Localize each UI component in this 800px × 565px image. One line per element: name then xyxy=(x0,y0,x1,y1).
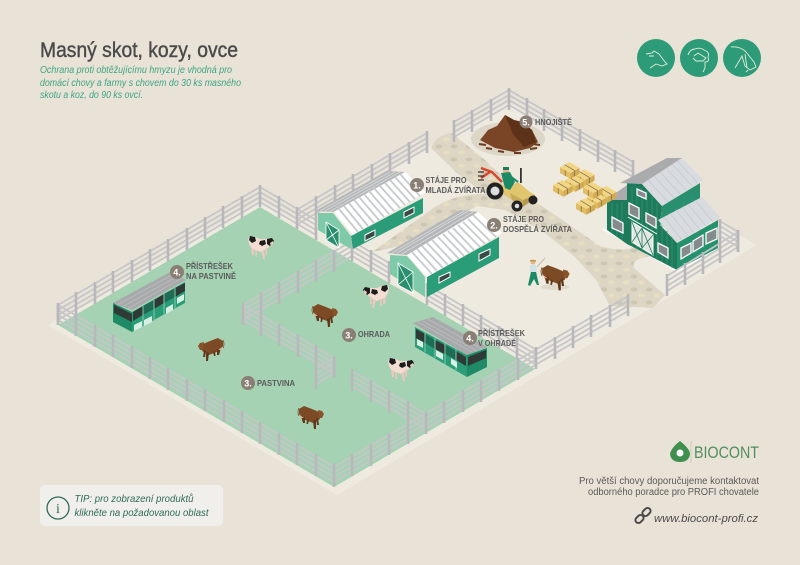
tip box: i xyxy=(56,502,60,517)
label 2: stables for adult animals: DOSPĚLÁ ZVÍŘATA xyxy=(503,223,572,234)
back fences xyxy=(58,88,738,364)
Biocont logo xyxy=(670,441,759,463)
Biocont logo: BIOCONT xyxy=(694,443,759,462)
website link text: www.biocont-profi.cz xyxy=(654,513,759,525)
holstein cow top xyxy=(248,236,274,259)
label 3: paddock: OHRADA xyxy=(358,329,390,339)
label 2: stables for adult animals: STÁJE PRO xyxy=(503,214,544,224)
label 2: stables for adult animals: 2. xyxy=(490,220,498,230)
farm ground platform xyxy=(48,103,757,495)
icon: sheep xyxy=(680,39,718,77)
tip box: klikněte na požadovanou oblast xyxy=(74,507,209,519)
label 1: stables for young animals: STÁJE PRO xyxy=(426,175,467,185)
tractor with driver xyxy=(478,167,538,212)
label 4: paddock shelter xyxy=(463,327,526,348)
label 3: pasture: PASTVINA xyxy=(257,378,295,388)
label 5: manure heap xyxy=(520,116,572,128)
advisor recommendation text: odborného poradce pro PROFI chovatele xyxy=(588,487,759,498)
brown cow in the paddock xyxy=(312,304,338,327)
label 5: manure heap: HNOJIŠTĚ xyxy=(535,116,572,127)
holstein cow by paddock shelter xyxy=(388,358,414,381)
subtitle: skotu a koz, do 90 ks ovcí. xyxy=(40,90,143,101)
farmer with cow xyxy=(528,258,570,290)
label 1: stables for young animals xyxy=(410,175,486,195)
advisor recommendation text: Pro větší chovy doporučujeme kontaktovat xyxy=(579,476,759,487)
right fence by barn xyxy=(667,230,738,296)
label 4: pasture shelter xyxy=(170,260,236,281)
label 1: stables for young animals: MLADÁ ZVÍŘATA xyxy=(426,184,486,195)
tip box: TIP: pro zobrazení produktů xyxy=(74,493,194,505)
label 4: paddock shelter: 4. xyxy=(466,334,474,344)
pasture and paddock green area xyxy=(58,207,535,487)
tip box xyxy=(40,485,223,526)
label 5: manure heap: 5. xyxy=(522,118,530,128)
shelter in the paddock xyxy=(413,317,487,377)
barn 2: stable for adult animals xyxy=(387,210,502,297)
subtitle: Ochrana proti obtěžujícímu hmyzu je vhodná pro xyxy=(40,65,232,76)
label 4: paddock shelter: PŘÍSTŘEŠEK xyxy=(478,327,526,338)
shelter on the pasture xyxy=(113,272,186,332)
cobblestone path xyxy=(372,133,665,308)
brown cow on the pasture left xyxy=(198,338,224,361)
label 4: pasture shelter: PŘÍSTŘEŠEK xyxy=(186,260,234,271)
large main barn xyxy=(603,158,720,272)
icon: link xyxy=(634,507,652,524)
front fences xyxy=(58,294,628,487)
label 3: paddock xyxy=(342,328,390,342)
title: Masný skot, kozy, ovce xyxy=(40,39,238,62)
label 3: pasture: 3. xyxy=(244,378,252,388)
label 1: stables for young animals: 1. xyxy=(413,180,421,190)
barn 1: stable for young animals xyxy=(315,171,426,249)
hay bales xyxy=(553,162,616,215)
subtitle xyxy=(40,65,241,101)
icon: cattle xyxy=(637,39,675,77)
label 3: paddock: 3. xyxy=(345,330,353,340)
icon: goat xyxy=(723,39,761,77)
holstein cow by barn 2 xyxy=(363,285,389,308)
label 4: pasture shelter: 4. xyxy=(173,268,181,278)
label 2: stables for adult animals xyxy=(487,214,572,234)
advisor recommendation text xyxy=(579,476,759,498)
label 4: pasture shelter: NA PASTVINĚ xyxy=(186,270,236,281)
brown cow on the pasture bottom xyxy=(298,406,324,429)
label 3: pasture xyxy=(241,376,295,390)
subtitle: domácí chovy a farmy s chovem do 30 ks masného xyxy=(40,78,241,89)
manure heap xyxy=(471,115,545,156)
label 4: paddock shelter: V OHRADĚ xyxy=(478,337,516,348)
